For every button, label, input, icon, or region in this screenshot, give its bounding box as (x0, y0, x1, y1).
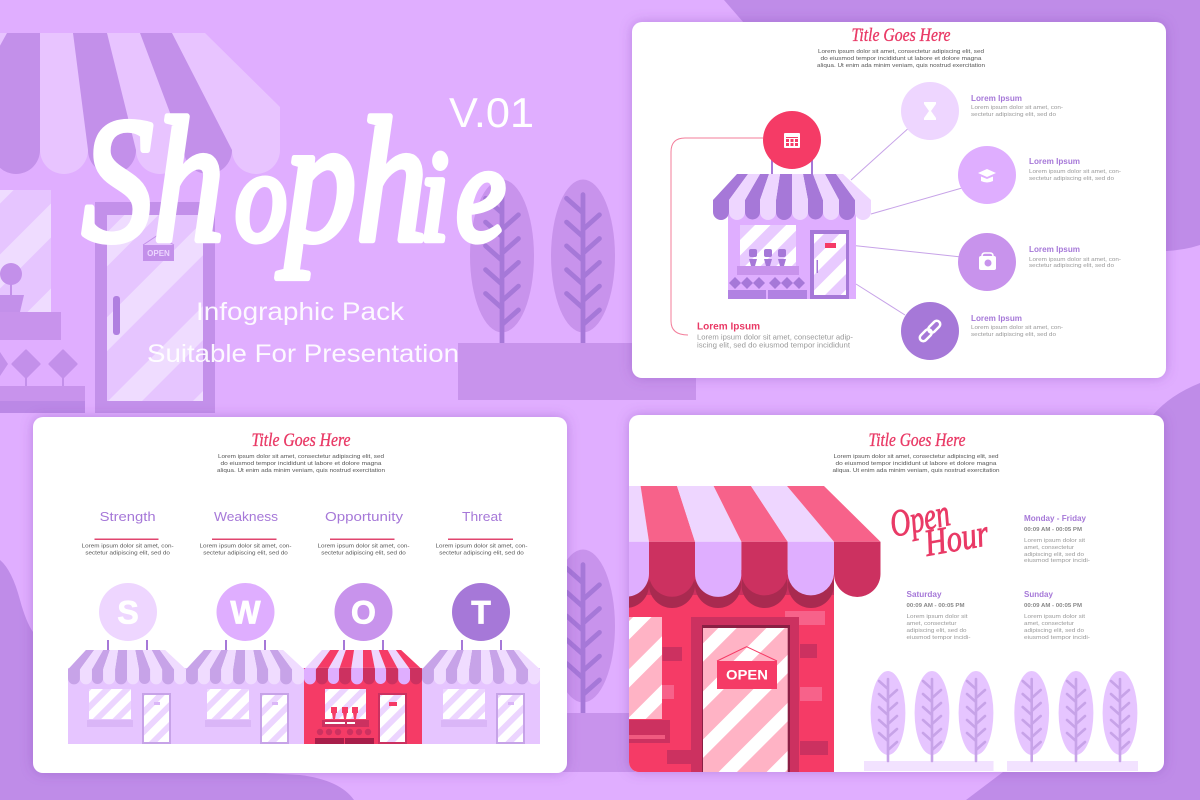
intro text: do eiusmod tempor incididunt ut labore et dolore magna (820, 56, 982, 62)
intro text: Lorem ipsum dolor sit amet, consectetur adipiscing elit, sed (834, 454, 998, 460)
label: item 1 (971, 94, 1063, 118)
label: item 4: sectetur adipiscing elit, sed do (971, 332, 1056, 338)
column: strength: Lorem ipsum dolor sit amet, con- (82, 544, 174, 550)
intro text: aliqua. Ut enim ada minim veniam, quis nostrud exercitation (217, 468, 385, 474)
main title: o (235, 125, 287, 269)
store: W (186, 583, 304, 744)
column: weakness: sectetur adipiscing elit, sed do (203, 550, 288, 556)
door sign: OPEN (726, 668, 768, 682)
hours: monday to friday: eiusmod tempor incidi- (1024, 558, 1090, 564)
hours: saturday: Saturday (906, 590, 942, 599)
column: threat: sectetur adipiscing elit, sed do (439, 550, 524, 556)
store: T: T (471, 594, 491, 630)
main title: i (420, 125, 449, 269)
open hour script: Open (886, 492, 954, 546)
store: T (422, 583, 540, 744)
intro text: do eiusmod tempor incididunt ut labore et dolore magna (836, 461, 997, 467)
store: S (68, 583, 186, 744)
hours: monday to friday: Monday - Friday (1024, 514, 1087, 523)
intro text: do eiusmod tempor incididunt ut labore et dolore magna (220, 461, 382, 467)
main title: Sh (82, 81, 224, 279)
main title: ph (276, 81, 427, 279)
label: main: Lorem ipsum dolor sit amet, consectetur adip- (697, 332, 854, 342)
heading: Title Goes Here (252, 430, 350, 451)
intro text: aliqua. Ut enim ada minim veniam, quis nostrud exercitation (817, 63, 985, 69)
column: opportunity: Opportunity (325, 509, 404, 524)
background hedge and planter (0, 351, 85, 413)
hours: monday to friday (1024, 514, 1090, 564)
subtitle (147, 298, 459, 368)
main title (82, 81, 506, 279)
hours: saturday: Lorem ipsum dolor sit (906, 614, 968, 620)
intro text: Lorem ipsum dolor sit amet, consectetur adipiscing elit, sed (218, 454, 384, 460)
label: item 1: sectetur adipiscing elit, sed do (971, 112, 1056, 118)
storefront (713, 160, 871, 299)
hours: sunday: Sunday (1024, 590, 1054, 599)
label: item 1: Lorem Ipsum (971, 94, 1022, 103)
hours: monday to friday: Lorem ipsum dolor sit (1024, 538, 1085, 544)
store: W: W (230, 594, 261, 630)
label: item 4 (971, 314, 1063, 338)
hours: saturday: 00:09 AM - 00:05 PM (906, 603, 965, 609)
label: main: iscing elit, sed do eiusmod tempor incididunt (697, 340, 851, 350)
column: opportunity: Lorem ipsum dolor sit amet, con- (318, 544, 410, 550)
version label: V.01 (449, 89, 534, 136)
store: O: O (351, 594, 376, 630)
icon: hourglass (901, 82, 959, 140)
column: opportunity: sectetur adipiscing elit, sed do (321, 550, 406, 556)
background window with plant (0, 190, 61, 340)
panel: open hours (600, 415, 1164, 772)
label: item 2: sectetur adipiscing elit, sed do (1029, 176, 1114, 182)
column: weakness: Weakness (214, 509, 279, 524)
panel: SWOT (33, 417, 567, 773)
label: item 4: Lorem ipsum dolor sit amet, con- (971, 325, 1063, 331)
hours: monday to friday: amet, consectetur (1024, 545, 1074, 551)
column: threat: Lorem ipsum dolor sit amet, con- (436, 544, 528, 550)
label: main: Lorem Ipsum (697, 322, 760, 332)
hours: sunday: 00:09 AM - 00:05 PM (1024, 603, 1082, 609)
column: threat (436, 509, 528, 556)
heading: Title Goes Here (868, 430, 966, 451)
label: item 2: Lorem ipsum dolor sit amet, con- (1029, 169, 1121, 175)
intro text (217, 454, 385, 474)
label: item 2: Lorem Ipsum (1029, 157, 1080, 166)
label: item 3: sectetur adipiscing elit, sed do (1029, 263, 1114, 269)
icon: calendar (763, 111, 821, 169)
column: opportunity (318, 509, 410, 556)
label: item 3 (1029, 245, 1121, 269)
icon: link (901, 302, 959, 360)
open hour script: Hour (920, 512, 992, 565)
hours: sunday: eiusmod tempor incidi- (1024, 635, 1090, 641)
open hour script (886, 492, 992, 565)
main title: e (456, 116, 506, 271)
column: strength (82, 509, 174, 556)
background storefront awning (0, 33, 280, 174)
store: O (304, 583, 422, 744)
panel: store diagram (632, 22, 1166, 378)
column: strength: sectetur adipiscing elit, sed do (85, 550, 170, 556)
label: item 3: Lorem ipsum dolor sit amet, con- (1029, 257, 1121, 263)
hours: saturday (906, 590, 971, 641)
heading: Title Goes Here (852, 25, 950, 46)
label: item 1: Lorem ipsum dolor sit amet, con- (971, 105, 1063, 111)
hours: monday to friday: adipiscing elit, sed do (1024, 552, 1084, 558)
store: S: S (117, 594, 139, 630)
hours: sunday: adipiscing elit, sed do (1024, 628, 1084, 634)
label: item 2 (1029, 157, 1121, 182)
column: weakness (200, 509, 292, 556)
column: threat: Threat (462, 509, 502, 524)
icon: camera (958, 233, 1016, 291)
subtitle: Infographic Pack (196, 298, 405, 326)
hours: saturday: amet, consectetur (906, 621, 957, 627)
connector lines (671, 129, 962, 335)
label: item 4: Lorem Ipsum (971, 314, 1022, 323)
column: strength: Strength (100, 509, 156, 524)
hours: saturday: adipiscing elit, sed do (906, 628, 966, 634)
intro text: Lorem ipsum dolor sit amet, consectetur adipiscing elit, sed (818, 49, 984, 55)
door sign (717, 647, 777, 689)
label: main (697, 322, 854, 350)
hours: sunday (1024, 590, 1090, 641)
background door: OPEN (147, 249, 170, 258)
background door (95, 202, 215, 413)
intro text (832, 454, 1000, 474)
intro text: aliqua. Ut enim ada minim veniam, quis nostrud exercitation (832, 468, 1000, 474)
row of trees (864, 671, 1138, 771)
hours: sunday: amet, consectetur (1024, 621, 1074, 627)
hours: monday to friday: 00:09 AM - 00:05 PM (1024, 527, 1082, 533)
large storefront (629, 486, 880, 772)
hours: sunday: Lorem ipsum dolor sit (1024, 614, 1085, 620)
background trees and planter (458, 180, 696, 772)
intro text (817, 49, 985, 69)
label: item 3: Lorem Ipsum (1029, 245, 1080, 254)
column: weakness: Lorem ipsum dolor sit amet, con- (200, 544, 292, 550)
hours: saturday: eiusmod tempor incidi- (906, 635, 971, 641)
icon: graduation cap (958, 146, 1016, 204)
subtitle: Suitable For Presentation (147, 340, 459, 368)
